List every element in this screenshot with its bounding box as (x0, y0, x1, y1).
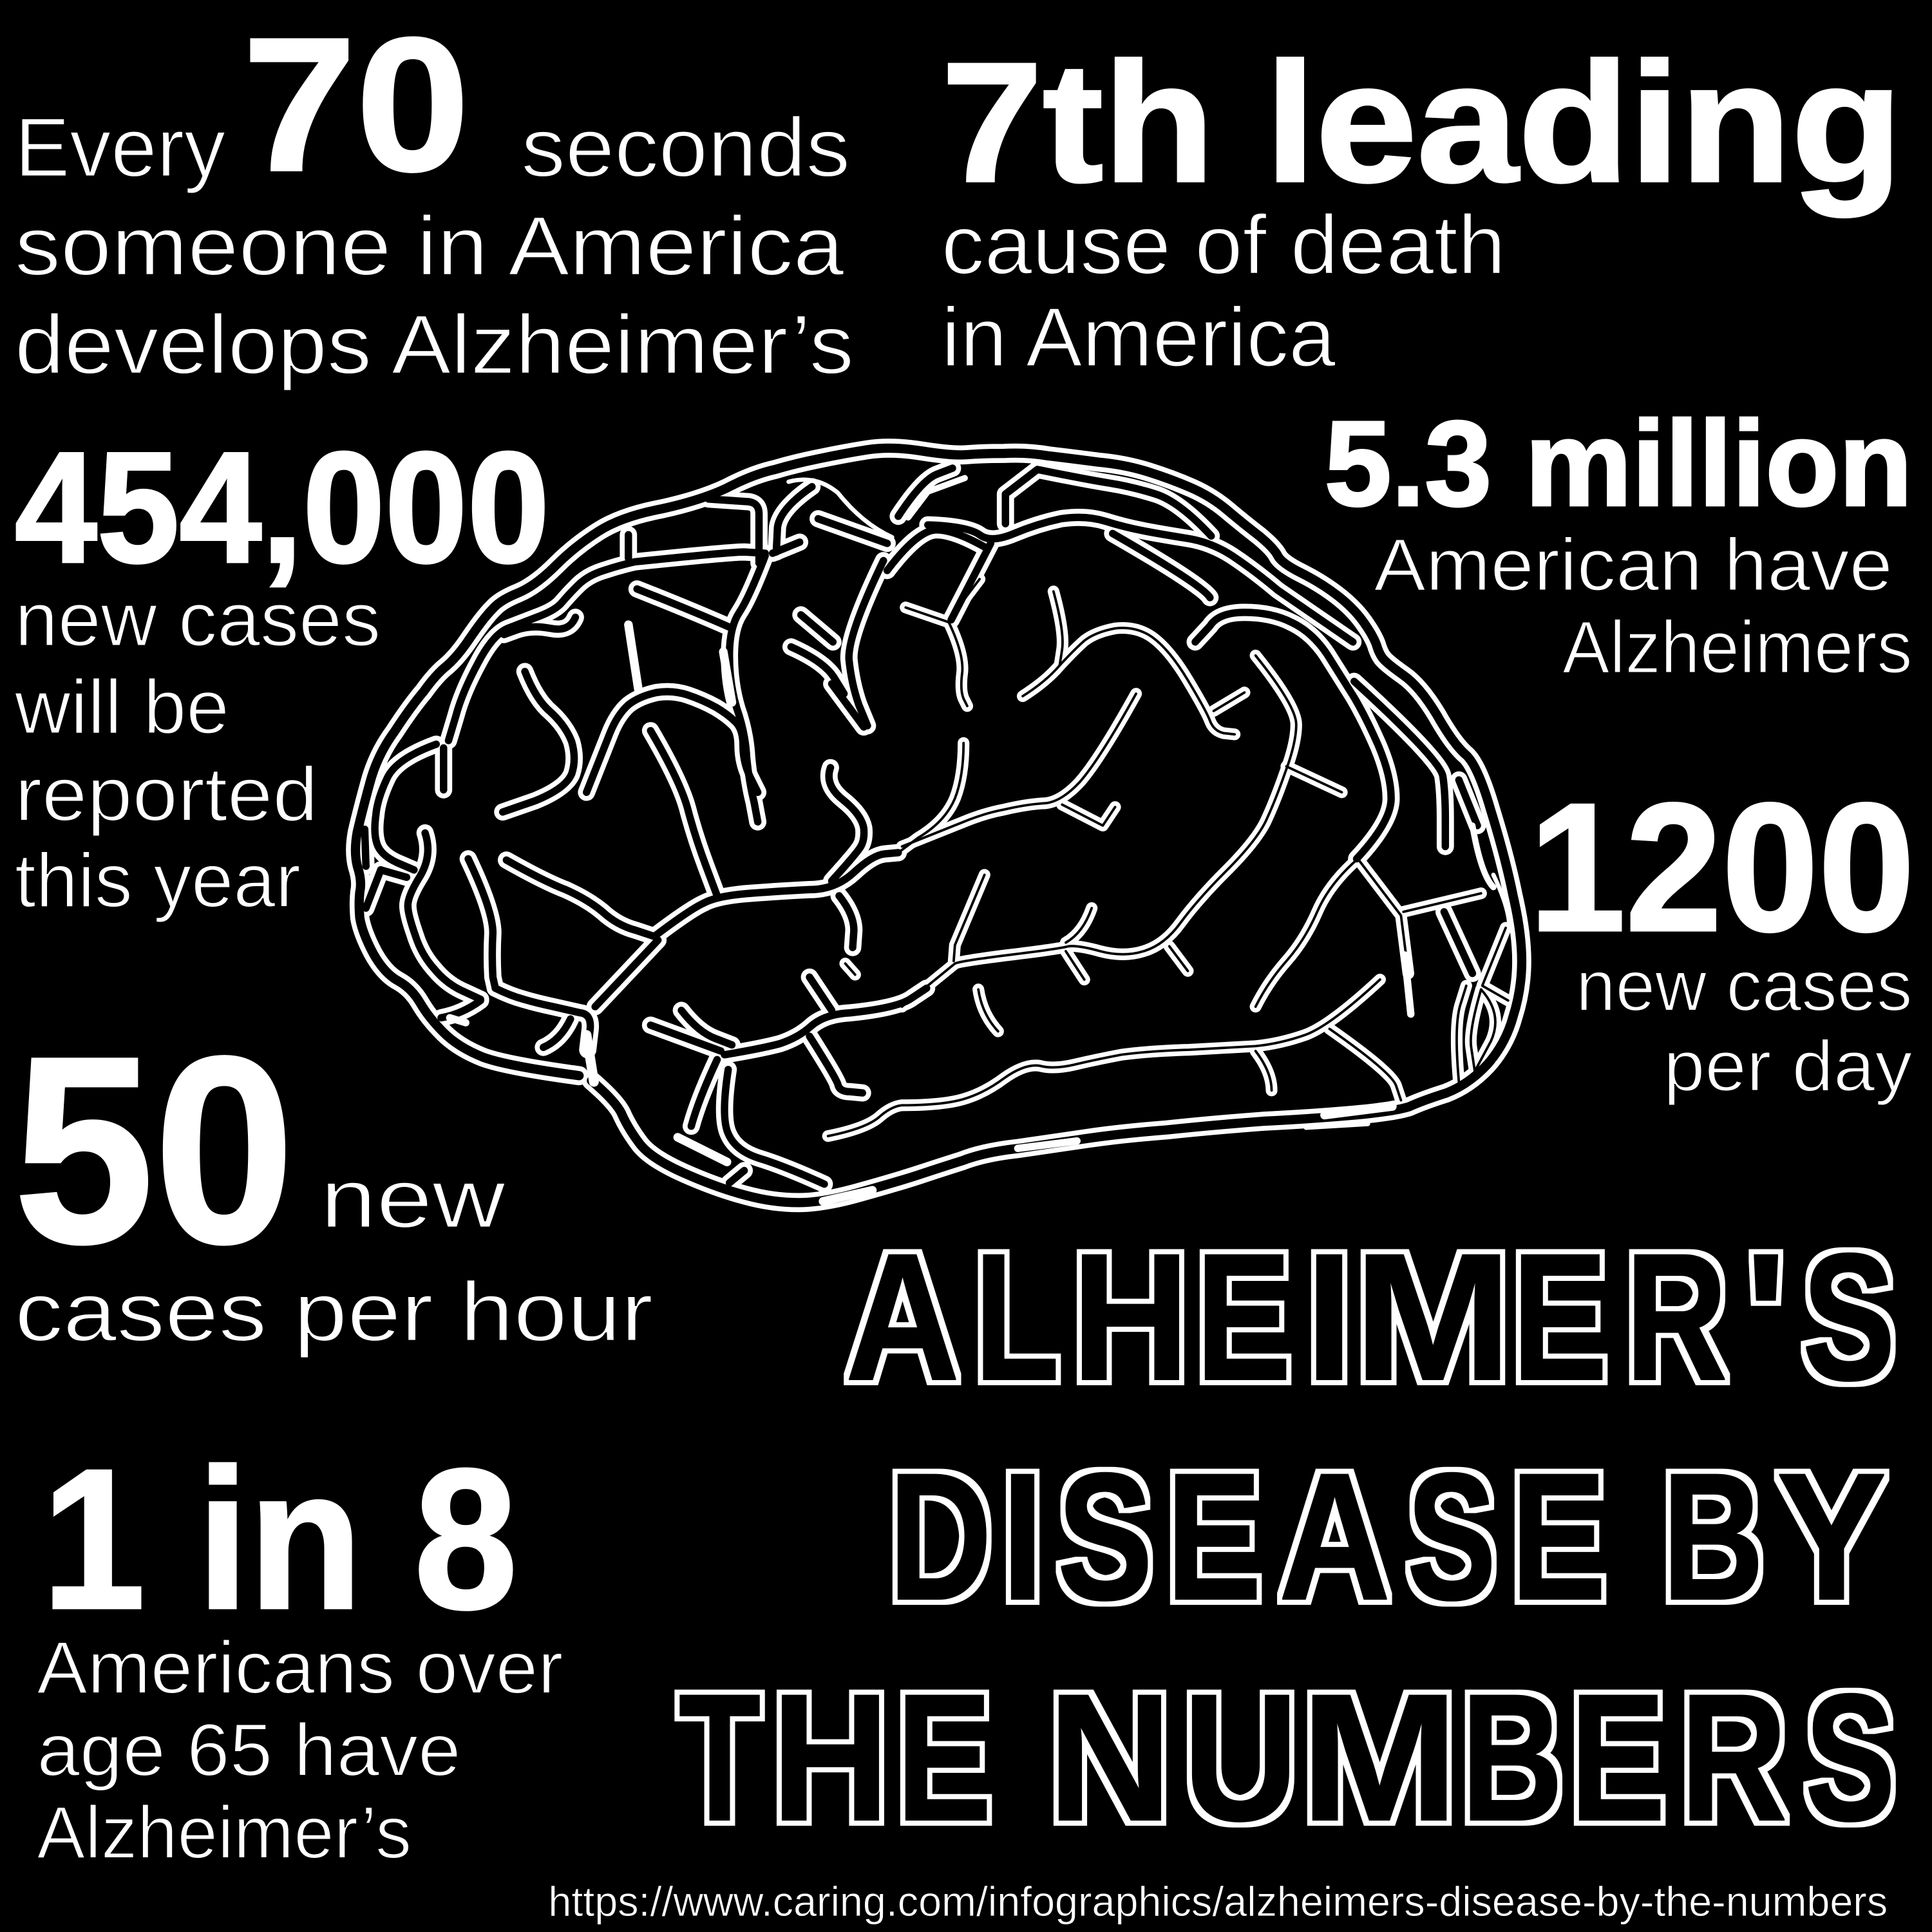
stat: every 70 seconds: Every (15, 100, 225, 194)
stat: 454,000 new cases: 454,000 (15, 419, 549, 595)
stat: 1 in 8 Americans: 1 in 8 (42, 1427, 518, 1651)
title: outlined heading: S (1803, 1216, 1895, 1418)
title: outlined heading: R (1625, 1216, 1727, 1418)
stat: 50 new cases per hour: 50 (14, 1001, 294, 1299)
title: outlined heading: I (1001, 1435, 1044, 1638)
title: outlined heading: S (1407, 1435, 1496, 1638)
stat: 1200 new cases per day: per day (1663, 1026, 1913, 1106)
title: outlined heading: Y (1777, 1435, 1886, 1638)
stat: 454,000 new cases: new cases (15, 578, 381, 663)
title: outlined heading: ' (1745, 1216, 1786, 1418)
stat: 1 in 8 Americans: age 65 have (37, 1709, 461, 1792)
stat: 5.3 million: 5.3 million (1325, 395, 1912, 531)
stat: 7th leading cause of death: in America (942, 290, 1336, 384)
stat: 1200 new cases per day: new cases (1576, 946, 1912, 1026)
title: outlined heading: A (846, 1216, 960, 1418)
source url: https://www.caring.com/infographics/alzheimers-disease-by-the-numbers (548, 1878, 1888, 1925)
title: outlined heading (679, 1216, 1895, 1859)
title: outlined heading: H (1072, 1216, 1189, 1418)
stat: 7th leading cause of death: 7th leading (942, 27, 1902, 218)
stat: 7th leading cause of death (942, 27, 1902, 384)
title: outlined heading: E (1512, 1216, 1607, 1418)
stat: every 70 seconds (15, 0, 854, 392)
stat: 454,000 new cases (14, 419, 549, 923)
stat: 50 new cases per hour: cases per hour (15, 1265, 653, 1359)
stat: every 70 seconds: someone in America (15, 199, 844, 293)
stat: 1 in 8 Americans: Americans over (37, 1627, 563, 1709)
title: outlined heading: B (1461, 1656, 1563, 1859)
title: outlined heading: D (889, 1435, 992, 1638)
stat: 50 new cases per hour: new (320, 1151, 506, 1245)
title: outlined heading: U (1183, 1656, 1298, 1859)
title: outlined heading: I (1305, 1216, 1353, 1418)
stat: 1200 new cases per day: 1200 (1529, 766, 1915, 970)
stat: 1 in 8 Americans (37, 1427, 563, 1874)
stat: 1 in 8 Americans: Alzheimer’s (37, 1792, 412, 1874)
title: outlined heading: N (1048, 1656, 1172, 1859)
title: outlined heading: S (1057, 1435, 1153, 1638)
title: outlined heading: E (1196, 1216, 1291, 1418)
title: outlined heading: E (1570, 1656, 1665, 1859)
stat: every 70 seconds: seconds (521, 100, 850, 194)
stat: 7th leading cause of death: cause of death (942, 198, 1506, 292)
stat: 454,000 new cases: this year (15, 838, 301, 923)
brain outline illustration (355, 448, 1522, 1202)
title: outlined heading: B (1662, 1435, 1764, 1638)
title: outlined heading: S (1805, 1656, 1895, 1859)
title: outlined heading: E (896, 1656, 992, 1859)
title: outlined heading: M (1354, 1216, 1512, 1418)
title: outlined heading: H (772, 1656, 889, 1859)
title: outlined heading: T (679, 1656, 761, 1859)
title: outlined heading: A (1279, 1435, 1390, 1638)
stat: every 70 seconds: 70 (243, 0, 469, 211)
stat: 454,000 new cases: will be (14, 665, 229, 750)
stat: 1200 new cases per day (1529, 766, 1915, 1106)
title: outlined heading: M (1300, 1656, 1459, 1859)
title: outlined heading: R (1680, 1656, 1787, 1859)
stat: 5.3 million: American have (1374, 524, 1893, 606)
stat: every 70 seconds: develops Alzheimer’s (15, 298, 854, 392)
stat: 5.3 million (1325, 395, 1912, 689)
title: outlined heading: L (974, 1216, 1059, 1418)
title: outlined heading: E (1166, 1435, 1262, 1638)
stat: 5.3 million: Alzheimers (1562, 607, 1912, 689)
stat: 454,000 new cases: reported (15, 752, 318, 837)
stat: 50 new cases per hour (14, 1001, 653, 1359)
title: outlined heading: E (1511, 1435, 1606, 1638)
